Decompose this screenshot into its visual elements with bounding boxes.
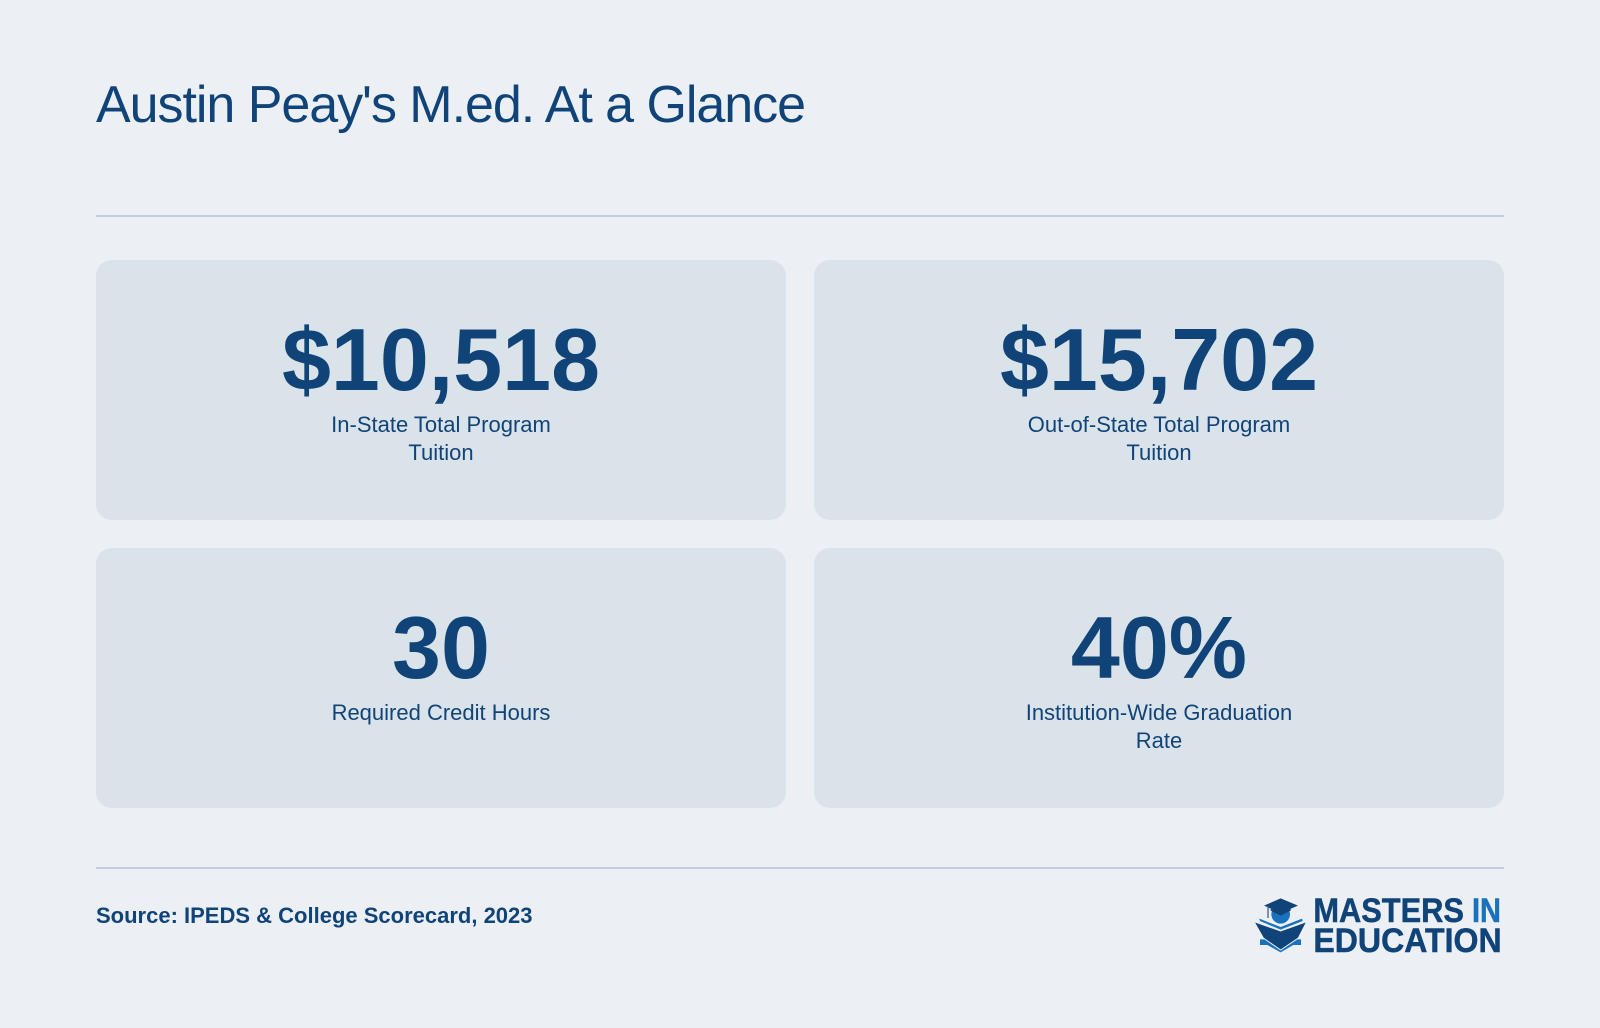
stat: in-state value: $10,518 (282, 310, 600, 409)
panel: graduation rate (814, 548, 1504, 808)
logo: Masters in Education (1255, 892, 1502, 960)
label: in-state: In-State Total Program (331, 412, 551, 437)
label: graduation rate: Rate (1136, 728, 1182, 753)
icon: graduation cap over book (1254, 898, 1307, 952)
stat: credit hours value: 30 (392, 598, 490, 697)
source note: Source: IPEDS & College Scorecard, 2023 (96, 903, 533, 928)
title: Austin Peay's M.ed. At a Glance (96, 76, 805, 134)
logo wordmark: EDUCATION (1313, 922, 1502, 960)
label: graduation rate: Institution-Wide Graduation (1026, 700, 1292, 725)
label: out-of-state: Out-of-State Total Program (1028, 412, 1290, 437)
stat: out-of-state value: $15,702 (1000, 310, 1318, 409)
label: credit hours: Required Credit Hours (332, 700, 550, 725)
label: out-of-state: Tuition (1126, 440, 1192, 465)
label: out-of-state (1028, 412, 1290, 465)
logo wordmark: IN (1472, 892, 1501, 930)
label: in-state: Tuition (408, 440, 474, 465)
label: graduation rate (1026, 700, 1292, 753)
panel: out-of-state tuition (814, 260, 1504, 520)
logo wordmark (1313, 892, 1502, 960)
logo wordmark: MASTERS (1313, 892, 1464, 930)
label: in-state (331, 412, 551, 465)
stat: graduation rate value: 40% (1071, 598, 1247, 697)
panel: in-state tuition (96, 260, 786, 520)
panel: credit hours (96, 548, 786, 808)
